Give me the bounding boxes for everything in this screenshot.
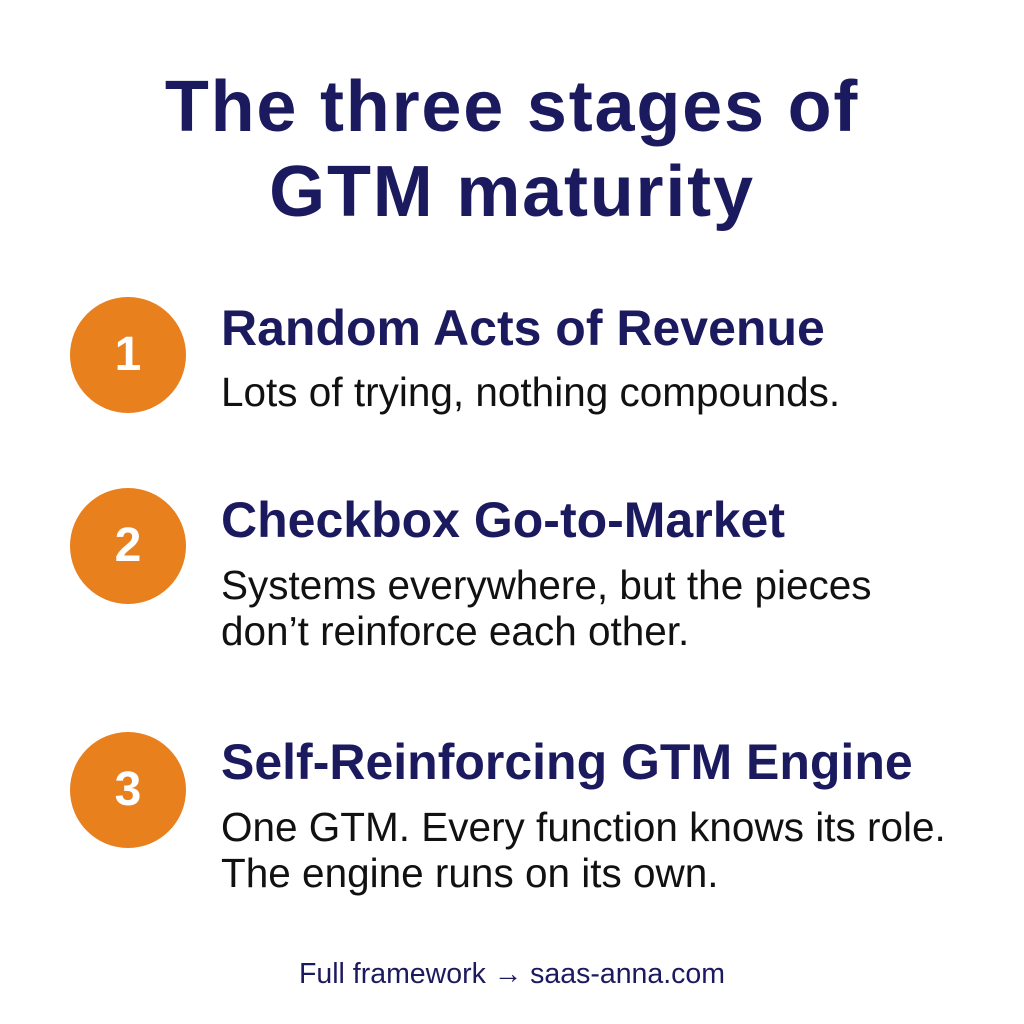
icon: number 3 circle [70,732,186,848]
heading: stage 3: Self-Reinforcing GTM Engine [221,734,913,790]
icon: number 1 circle [70,297,186,413]
body: stage 2: don’t reinforce each other. [221,608,689,654]
footer link: Full framework → saas-anna.com [299,958,725,990]
icon: number 3 circle: 3 [115,763,141,816]
title: The three stages of [165,67,859,147]
body: stage 3: The engine runs on its own. [221,850,719,896]
body: stage 2 [221,562,872,654]
body: stage 2: Systems everywhere, but the pieces [221,562,872,608]
stage 1 [70,297,840,415]
body: stage 3 [221,804,946,896]
title [165,67,859,232]
body: stage 1: Lots of trying, nothing compounds. [221,369,840,415]
heading: stage 2: Checkbox Go-to-Market [221,492,785,548]
icon: number 2 circle [70,488,186,604]
heading: stage 1: Random Acts of Revenue [221,300,825,356]
body: stage 3: One GTM. Every function knows its role. [221,804,946,850]
stage 2 [70,488,872,654]
icon: number 2 circle: 2 [115,519,141,572]
title: GTM maturity [269,152,755,232]
stage 3 [70,732,946,896]
icon: number 1 circle: 1 [115,328,141,381]
